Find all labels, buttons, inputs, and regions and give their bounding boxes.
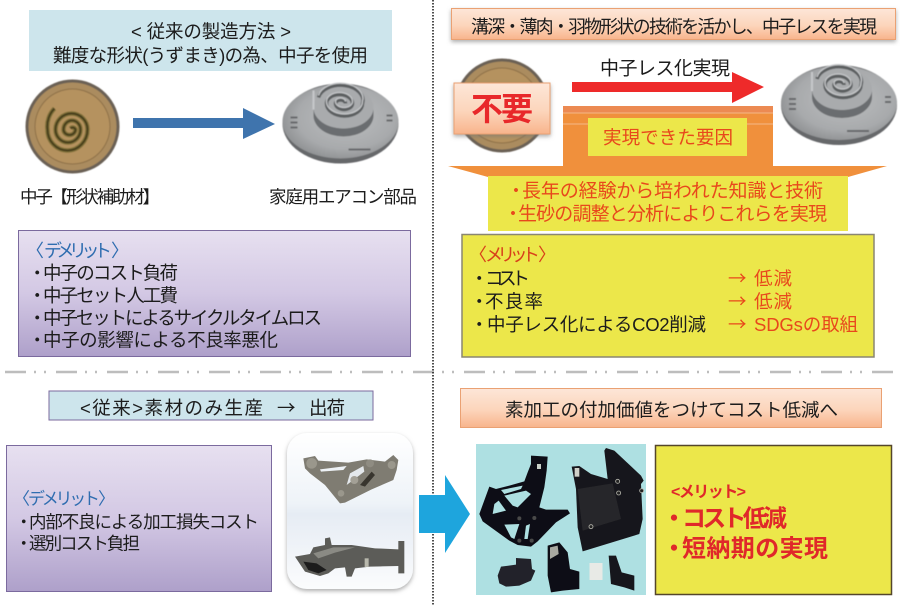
panel: demerits of raw material production: 選別コスト負担: [29, 534, 140, 554]
panel: demerits of core: [18, 230, 410, 356]
panel: demerits of raw material production: ・: [15, 512, 32, 532]
panel: merits: 中子レス化によるCO2削減: [487, 314, 706, 335]
panel: merits: →: [728, 311, 747, 337]
panel: merits: 〈: [469, 245, 487, 265]
icon: crossed-out sand core: [455, 58, 549, 152]
icon: raw bracket casting: [303, 455, 398, 503]
panel: coreless heading: 溝深・薄肉・羽物形状の技術を活かし、中子レスを実現: [471, 17, 877, 37]
panel: demerits of core: 中子セットによるサイクルタイムロス: [43, 308, 322, 328]
callout: not needed: 不要: [471, 91, 533, 127]
panel: merits: →: [728, 265, 747, 291]
panel: merits: 〉: [538, 245, 556, 265]
panel: conventional production heading: [49, 391, 373, 420]
arrow: large blue arrow: [419, 475, 470, 553]
panel: demerits of core: ・: [28, 262, 47, 284]
panel: merits: →: [728, 288, 747, 314]
panel: raw casting photos: [287, 433, 413, 589]
panel: factors: 生砂の調整と分析によりこれらを実現: [518, 203, 827, 225]
label: coreless achieved: 中子レス化実現: [600, 58, 730, 80]
panel: merits: ・: [470, 291, 489, 312]
panel: demerits of raw material production: ・: [15, 534, 32, 554]
panel: machined black parts photo: [476, 444, 646, 595]
icon: sand core photo: [26, 80, 120, 174]
panel: merits: 低減: [754, 291, 792, 312]
panel: merits: [462, 234, 874, 357]
label: air conditioner part: 家庭用エアコン部品: [269, 187, 417, 207]
panel: demerits of raw material production: [6, 446, 272, 592]
panel: conventional method heading: < 従来の製造方法 >: [131, 21, 291, 42]
icon: black panel: [572, 448, 644, 551]
vertical section divider: [432, 0, 434, 606]
icon: black bracket: [479, 456, 570, 547]
panel: demerits of raw material production: 内部不良による加工損失コスト: [29, 512, 259, 532]
panel: merits of machining: ・: [662, 536, 686, 562]
horizontal section divider: [5, 371, 900, 373]
panel: factors: ・: [504, 204, 523, 225]
label: core: 中子【形状補助材】: [20, 187, 160, 207]
panel: merits: コスト: [485, 268, 530, 289]
panel: demerits of core: 中子の影響による不良率悪化: [43, 330, 278, 350]
panel: merits of machining: [656, 446, 892, 594]
panel: demerits of raw material production: 〉: [98, 490, 115, 508]
panel: added value heading: 素加工の付加価値をつけてコスト低減へ: [505, 400, 838, 420]
panel: demerits of core: ・: [28, 308, 47, 328]
panel: factors: ・: [506, 181, 526, 202]
icon: black small mount: [498, 558, 535, 587]
panel: demerits of core: 中子のコスト負荷: [43, 262, 178, 284]
icon: black angle bracket: [609, 556, 634, 591]
panel: merits: 不良率: [485, 291, 543, 312]
panel: coreless heading: [452, 8, 896, 40]
panel: merits of machining: 短納期の実現: [682, 536, 828, 562]
panel: demerits of core: デメリット: [44, 241, 112, 261]
panel: conventional production heading: <従来>素材のみ生産: [80, 398, 263, 418]
panel: merits: 低減: [754, 268, 792, 289]
icon: black upright mount: [548, 542, 579, 592]
callout: not needed: [454, 83, 550, 134]
panel: merits: ・: [470, 268, 489, 289]
arrow: blue process arrow: [133, 108, 275, 139]
panel: demerits of core: 〉: [111, 241, 129, 261]
icon: cast aluminium part photo: [282, 83, 398, 164]
panel: merits: メリット: [485, 245, 540, 265]
panel: demerits of raw material production: デメリット: [28, 488, 100, 508]
panel: added value heading: [460, 388, 882, 428]
panel: merits of machining: ・: [662, 506, 686, 532]
label: factors achieved: 実現できた要因: [603, 127, 733, 148]
panel: merits: ・: [470, 314, 489, 335]
panel: demerits of core: 〈: [26, 241, 44, 261]
panel: demerits of core: 中子セット人工費: [43, 285, 178, 306]
panel: factors: 長年の経験から培われた知識と技術: [522, 180, 823, 202]
panel: conventional method heading: [29, 10, 392, 71]
icon: cast aluminium part photo: [781, 65, 897, 145]
panel: demerits of core: ・: [28, 285, 47, 306]
panel: factors: [488, 176, 848, 231]
panel: merits of machining: コスト低減: [682, 506, 787, 532]
panel: merits: SDGsの取組: [754, 314, 858, 335]
arrow: red achievement arrow: [572, 72, 764, 103]
panel: conventional method heading: 難度な形状(うずまき)の為、中子を使用: [53, 45, 368, 66]
arrow: orange factor callout shape: [448, 106, 887, 177]
label: factors achieved: [588, 118, 747, 156]
panel: conventional production heading: →: [277, 394, 296, 420]
icon: white label: [590, 563, 602, 580]
panel: demerits of raw material production: 〈: [13, 490, 30, 508]
panel: merits of machining: <メリット>: [671, 484, 746, 501]
panel: demerits of core: ・: [28, 330, 47, 350]
icon: raw pipe casting: [295, 537, 404, 577]
panel: conventional production heading: 出荷: [309, 398, 345, 418]
